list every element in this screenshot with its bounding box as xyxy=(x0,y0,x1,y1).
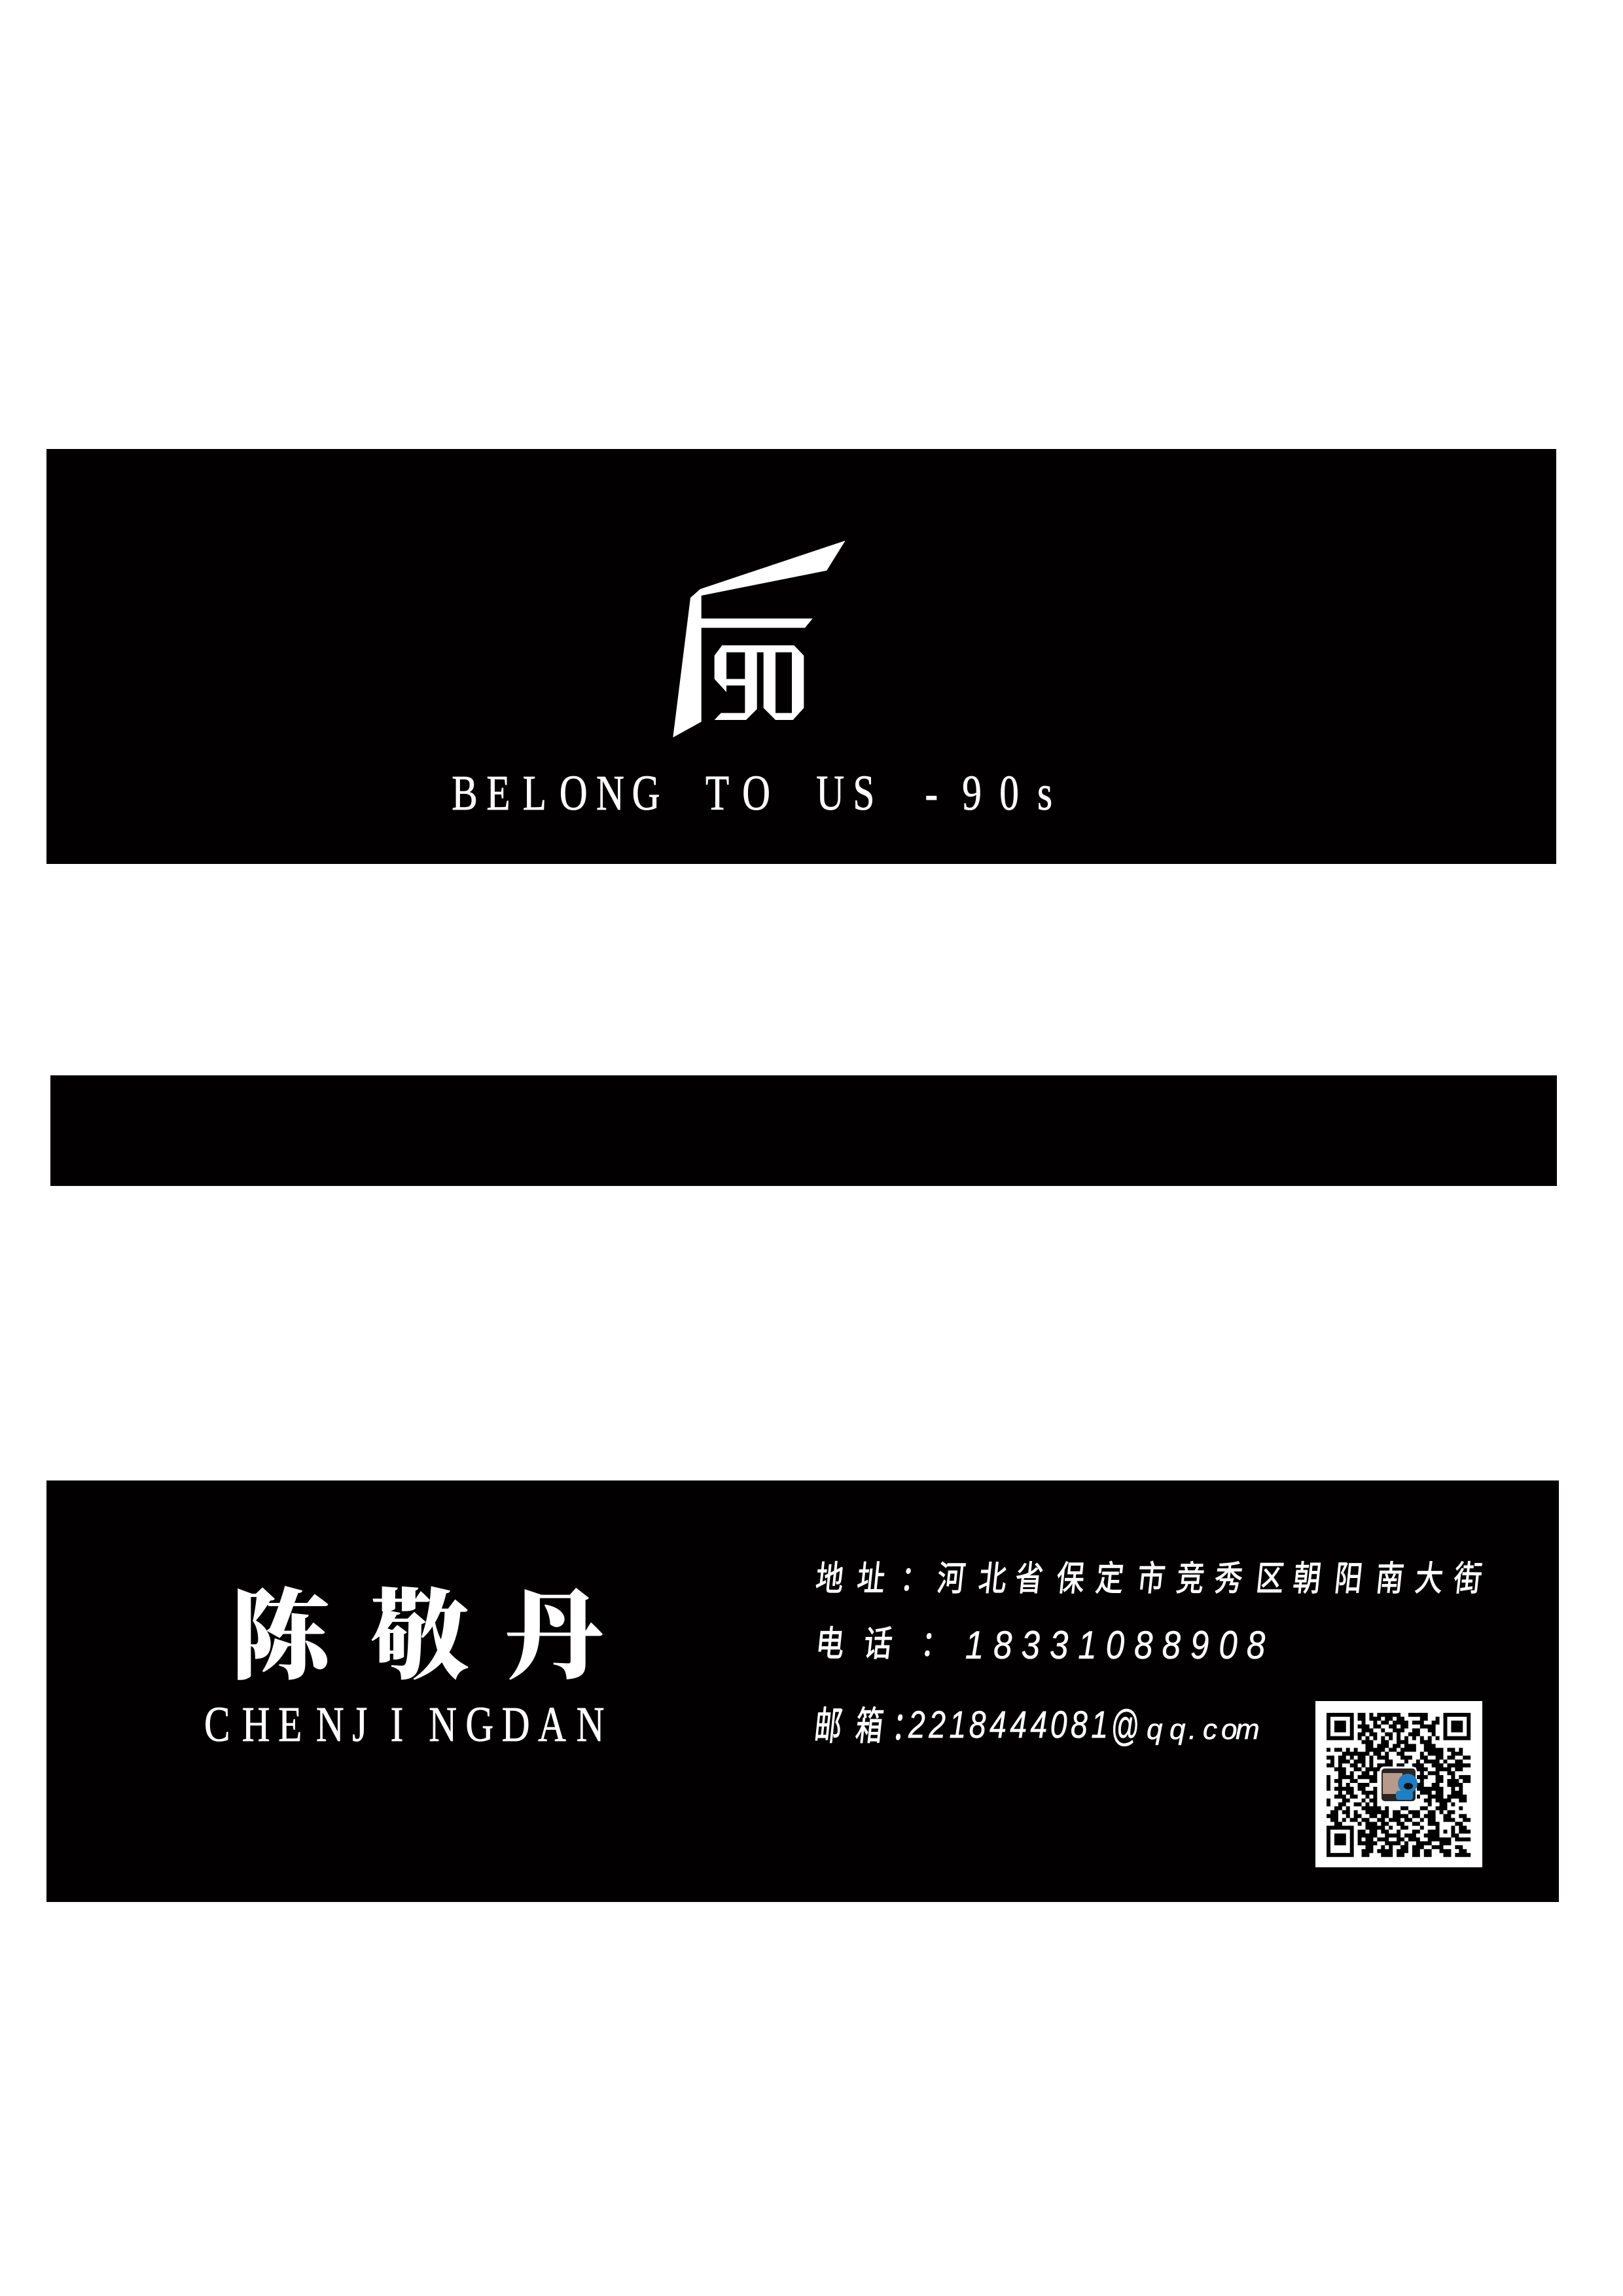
email line xyxy=(812,1702,1260,1749)
QR code xyxy=(1315,1701,1482,1867)
name in Chinese: 陈敬丹 xyxy=(232,1557,603,1698)
panel: logo banner xyxy=(46,449,1556,864)
panel: contact card xyxy=(46,1480,1559,1902)
QR centre avatar xyxy=(1380,1767,1418,1803)
address line: 地址：河北省保定市竞秀区朝阳南大街 xyxy=(814,1560,1484,1598)
phone line: 电话： xyxy=(814,1625,952,1664)
icon: F90 logo xyxy=(673,541,846,738)
email line: 2218444081 xyxy=(908,1704,1108,1746)
email line: qq.com xyxy=(1147,1713,1260,1746)
name in pinyin: CHENJINGDAN xyxy=(204,1696,604,1752)
email line: 邮箱： xyxy=(812,1705,922,1749)
phone line: 18331088908 xyxy=(965,1623,1265,1667)
email line: @ xyxy=(1111,1702,1139,1749)
panel: plain black strip xyxy=(50,1075,1557,1186)
slogan text: BELONG TO US -90s xyxy=(452,765,1052,821)
phone line xyxy=(814,1623,1265,1667)
